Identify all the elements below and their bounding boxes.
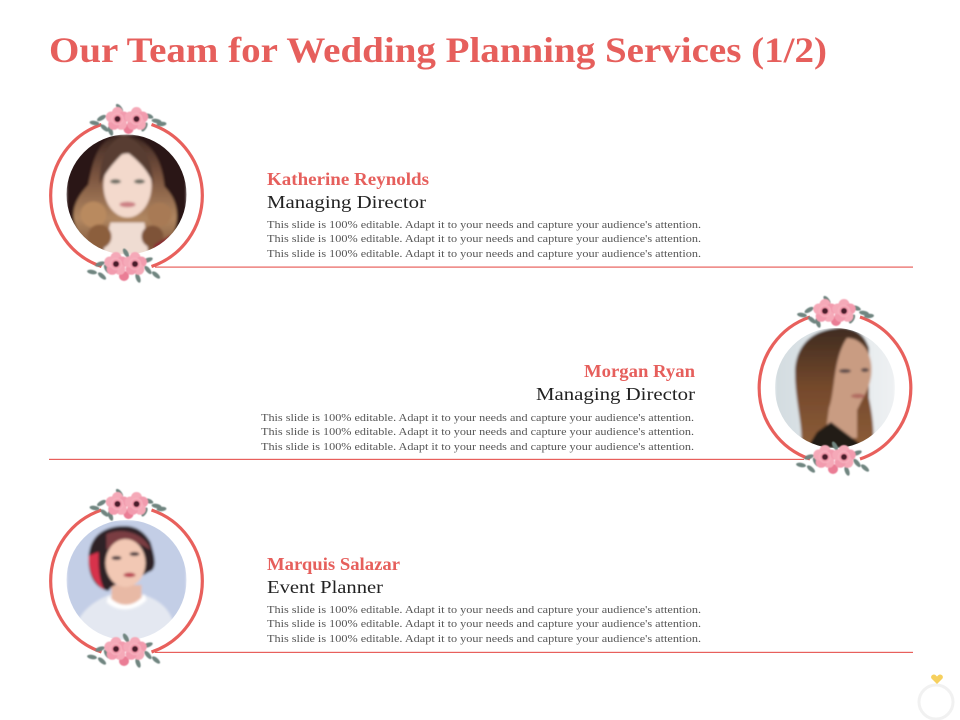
description [267, 605, 701, 645]
panel: Marquis Salazar [51, 488, 913, 668]
floral top [89, 488, 167, 521]
floral top [797, 295, 874, 328]
divider line [49, 459, 804, 460]
icon: wedding ring with heart [919, 675, 953, 719]
ring frame [51, 124, 202, 266]
description: This slide is 100% editable. Adapt it to your needs and capture your audience's attention. [267, 234, 701, 245]
role: Managing Director [536, 384, 695, 404]
panel: Katherine Reynolds [51, 103, 913, 283]
description: This slide is 100% editable. Adapt it to your needs and capture your audience's attention. [261, 442, 694, 453]
name: Marquis Salazar [267, 554, 400, 574]
description [267, 220, 701, 260]
description: This slide is 100% editable. Adapt it to your needs and capture your audience's attention. [267, 220, 701, 231]
name: Morgan Ryan [584, 361, 695, 381]
name: Katherine Reynolds [267, 169, 429, 189]
floral bottom [87, 633, 161, 668]
role: Managing Director [267, 192, 426, 212]
portrait: Morgan [775, 328, 895, 448]
role: Event Planner [267, 577, 383, 597]
description: This slide is 100% editable. Adapt it to your needs and capture your audience's attention. [267, 249, 701, 260]
description [261, 413, 694, 453]
divider line [155, 266, 913, 268]
description: This slide is 100% editable. Adapt it to your needs and capture your audience's attention. [261, 427, 694, 438]
description: This slide is 100% editable. Adapt it to your needs and capture your audience's attention. [267, 619, 701, 630]
floral bottom [87, 248, 161, 283]
portrait: Katherine [66, 134, 186, 254]
panel: Morgan Ryan [49, 295, 911, 476]
title: Our Team for Wedding Planning Services (1/2) [49, 30, 827, 70]
floral top [89, 103, 167, 136]
divider line [155, 652, 913, 653]
description: This slide is 100% editable. Adapt it to your needs and capture your audience's attention. [267, 605, 701, 616]
portrait: Marquis [66, 520, 186, 640]
floral bottom [796, 441, 870, 476]
ring frame [759, 317, 911, 459]
ring frame [51, 510, 202, 652]
description: This slide is 100% editable. Adapt it to your needs and capture your audience's attention. [267, 634, 701, 645]
description: This slide is 100% editable. Adapt it to your needs and capture your audience's attention. [261, 413, 694, 424]
